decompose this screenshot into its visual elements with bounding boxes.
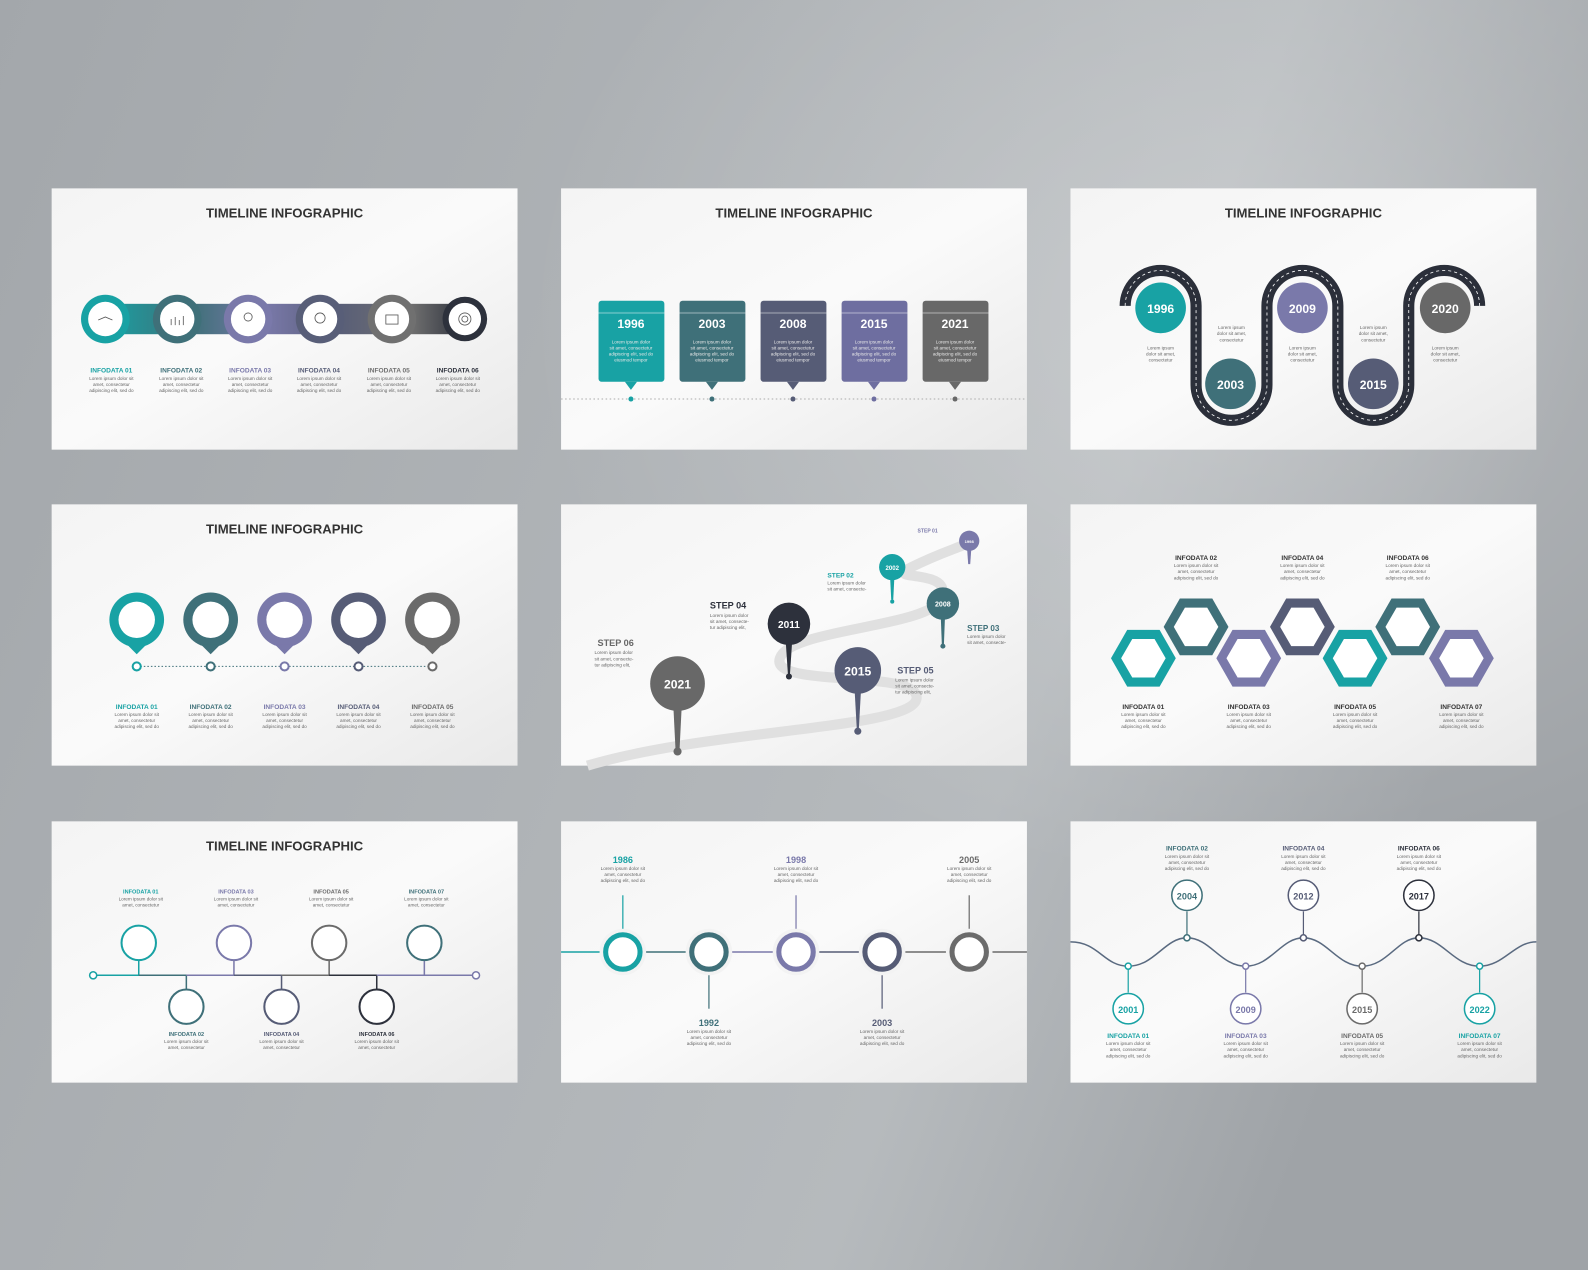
panel: slide 6 hexagons: INFODATA 03 <box>1228 704 1270 711</box>
step labels: STEP 01 <box>918 529 938 535</box>
year boxes: adipiscing elit, sed do <box>609 351 654 356</box>
panel: slide 4 pins: amet, consectetur <box>340 718 377 723</box>
labels: amet, consectetur <box>232 382 269 387</box>
panel: slide 9 wave timeline: INFODATA 06 <box>1398 846 1440 853</box>
panel: slide 9 wave timeline: Lorem ipsum dolor sit <box>1281 854 1326 859</box>
year circles: dolor sit amet, <box>1288 351 1317 356</box>
step pins: 2002 <box>885 566 900 572</box>
step labels: Lorem ipsum dolor <box>895 678 934 683</box>
panel: slide 9 wave timeline: adipiscing elit, sed do <box>1281 866 1326 871</box>
panel: slide 8 circle line: amet, consectetur <box>690 1035 728 1040</box>
labels <box>89 368 481 393</box>
title: TIMELINE INFOGRAPHIC <box>1225 206 1382 221</box>
labels: amet, consectetur <box>301 382 338 387</box>
panel: slide 4 pins: amet, consectetur <box>414 718 451 723</box>
panel: slide 4 pins: adipiscing elit, sed do <box>262 724 307 729</box>
panel: slide 8 circle line: 2005 <box>959 855 979 865</box>
year circles: 2003 <box>1217 378 1244 392</box>
panel: slide 4 pins: amet, consectetur <box>118 718 156 723</box>
year circles <box>1113 880 1495 1024</box>
panel: slide 9 wave timeline: amet, consectetur <box>1285 860 1322 865</box>
panel: slide 4 pins: adipiscing elit, sed do <box>336 724 381 729</box>
panel: slide 9 wave timeline: adipiscing elit, sed do <box>1165 866 1210 871</box>
panel: slide 8 circle line: amet, consectetur <box>864 1035 901 1040</box>
year boxes <box>599 301 988 402</box>
panel: slide 9 wave timeline: amet, consectetur <box>1344 1047 1381 1052</box>
labels: adipiscing elit, sed do <box>297 388 342 393</box>
labels: INFODATA 03 <box>229 368 271 375</box>
panel: slide 8 circle line: amet, consectetur <box>604 872 642 877</box>
year boxes: eiusmod tempor <box>938 358 972 363</box>
panel: slide 9 wave timeline: adipiscing elit, sed do <box>1106 1053 1151 1058</box>
year boxes: eiusmod tempor <box>695 358 729 363</box>
panel: slide 9 wave timeline: Lorem ipsum dolor sit <box>1106 1041 1151 1046</box>
step labels: Lorem ipsum dolor <box>967 634 1006 639</box>
panel: slide 8 circle line: Lorem ipsum dolor sit <box>687 1029 732 1034</box>
year boxes: Lorem ipsum dolor <box>774 339 813 344</box>
panel: slide 9 wave timeline: adipiscing elit, sed do <box>1457 1053 1502 1058</box>
panel: slide 9 wave timeline: INFODATA 07 <box>1459 1033 1501 1040</box>
panel: slide 6 hexagons: amet, consectetur <box>1284 569 1321 574</box>
step pins: 2008 <box>935 601 951 609</box>
year boxes: Lorem ipsum dolor <box>936 339 975 344</box>
panel: slide 6 hexagons <box>1070 504 1536 766</box>
panel: slide 8 circle line: 1986 <box>613 855 633 865</box>
panel: slide 6 hexagons: Lorem ipsum dolor sit <box>1333 712 1378 717</box>
panel: slide 8 circle line: Lorem ipsum dolor sit <box>774 866 819 871</box>
panel: slide 9 wave timeline: Lorem ipsum dolor sit <box>1457 1041 1503 1046</box>
panel: slide 9 wave timeline: INFODATA 04 <box>1282 846 1325 853</box>
panel: slide 9 wave timeline: INFODATA 02 <box>1166 846 1208 853</box>
year boxes: 2003 <box>698 317 726 331</box>
panel: slide 6 hexagons: adipiscing elit, sed do <box>1439 724 1484 729</box>
step labels: tur adipiscing elit, <box>594 662 630 667</box>
title: TIMELINE INFOGRAPHIC <box>206 206 364 221</box>
panel: slide 7 branch timeline: Lorem ipsum dolor sit <box>309 896 354 901</box>
panel: slide 6 hexagons: amet, consectetur <box>1230 718 1268 723</box>
year boxes: Lorem ipsum dolor <box>693 339 732 344</box>
step labels: sit amet, consecte- <box>710 619 749 624</box>
year boxes: adipiscing elit, sed do <box>933 351 978 356</box>
panel: slide 9 wave timeline: Lorem ipsum dolor sit <box>1340 1041 1385 1046</box>
wave <box>1070 938 1536 966</box>
panel: slide 9 wave timeline: amet, consectetur <box>1169 860 1206 865</box>
panel: slide 8 circle line: 1992 <box>699 1018 719 1028</box>
panel: slide 4 pins: Lorem ipsum dolor sit <box>115 712 160 717</box>
labels: amet, consectetur <box>370 382 408 387</box>
panel: slide 4 pins: INFODATA 04 <box>338 704 380 711</box>
circle timeline <box>561 895 1027 1009</box>
year circles: dolor sit amet, <box>1431 351 1460 356</box>
panel: slide 4 pins: adipiscing elit, sed do <box>115 724 159 729</box>
panel: slide 9 wave timeline: Lorem ipsum dolor sit <box>1224 1041 1269 1046</box>
panel: slide 8 circle line: Lorem ipsum dolor sit <box>947 866 992 871</box>
panel: slide 7 branch timeline: INFODATA 02 <box>169 1032 204 1038</box>
panel: slide 9 wave timeline: amet, consectetur <box>1110 1047 1147 1052</box>
step labels: sit amet, consecte- <box>895 684 935 689</box>
year circles: dolor sit amet, <box>1146 351 1175 356</box>
panel: slide 9 wave timeline: Lorem ipsum dolor sit <box>1397 854 1442 859</box>
panel: slide 7 branch timeline: INFODATA 04 <box>264 1032 300 1038</box>
chain timeline <box>81 295 487 343</box>
panel: slide 6 hexagons: amet, consectetur <box>1125 718 1162 723</box>
panel: slide 6 hexagons: adipiscing elit, sed do <box>1227 724 1271 729</box>
panel: slide 6 hexagons: adipiscing elit, sed do <box>1121 724 1166 729</box>
panel: slide 7 branch timeline: INFODATA 03 <box>218 889 254 895</box>
panel: slide 7 branch timeline: Lorem ipsum dolor sit <box>355 1039 400 1044</box>
panel: slide 3 road <box>1070 188 1536 450</box>
step pins: 2015 <box>844 665 872 679</box>
panel: slide 9 wave timeline: INFODATA 01 <box>1107 1033 1149 1040</box>
panel: slide 4 pins: INFODATA 03 <box>264 704 306 711</box>
year boxes: eiusmod tempor <box>614 358 648 363</box>
step pins <box>650 531 979 756</box>
labels: INFODATA 06 <box>437 368 479 375</box>
year circles: 2009 <box>1236 1005 1256 1015</box>
panel: slide 9 wave timeline: Lorem ipsum dolor sit <box>1165 854 1210 859</box>
title: TIMELINE INFOGRAPHIC <box>206 839 364 854</box>
year circles: 2015 <box>1352 1005 1372 1015</box>
year boxes: 2015 <box>860 317 888 331</box>
panel: slide 9 wave timeline: amet, consectetur <box>1461 1047 1499 1052</box>
panel: slide 4 pins: Lorem ipsum dolor sit <box>262 712 307 717</box>
panel: slide 2 year boxes <box>561 188 1027 450</box>
year boxes: sit amet, consectetur <box>772 345 815 350</box>
step labels: sit amet, consecte- <box>827 586 867 591</box>
panel: slide 7 branch timeline: amet, consectetur <box>358 1045 396 1050</box>
year boxes: adipiscing elit, sed do <box>852 351 897 356</box>
panel: slide 7 branch timeline: amet, consectetur <box>263 1045 300 1050</box>
panel: slide 4 pins: INFODATA 02 <box>190 704 232 711</box>
labels: INFODATA 05 <box>368 368 410 375</box>
panel: slide 6 hexagons: amet, consectetur <box>1337 718 1374 723</box>
hexagon chain <box>1111 599 1494 687</box>
panel: slide 6 hexagons: adipiscing elit, sed do <box>1174 575 1219 580</box>
step labels: tur adipiscing elit, <box>710 625 746 630</box>
panel: slide 6 hexagons: Lorem ipsum dolor sit <box>1386 563 1431 568</box>
step labels: Lorem ipsum dolor <box>594 650 633 655</box>
panel: slide 6 hexagons: Lorem ipsum dolor sit <box>1121 712 1166 717</box>
panel: slide 6 hexagons: amet, consectetur <box>1178 569 1215 574</box>
step labels: STEP 02 <box>827 572 854 579</box>
labels: adipiscing elit, sed do <box>367 388 412 393</box>
year boxes: 2008 <box>779 317 807 331</box>
panel: slide 4 pins: Lorem ipsum dolor sit <box>188 712 234 717</box>
panel: slide 8 circle line: adipiscing elit, sed do <box>601 878 645 883</box>
step labels: STEP 06 <box>598 638 634 648</box>
labels: INFODATA 02 <box>160 368 203 375</box>
panel: slide 6 hexagons: adipiscing elit, sed do <box>1333 724 1378 729</box>
panel: slide 8 circle line: adipiscing elit, sed do <box>774 878 819 883</box>
panel: slide 4 pins: INFODATA 05 <box>411 704 454 711</box>
panel: slide 7 branch timeline: Lorem ipsum dolor sit <box>164 1039 209 1044</box>
step pins: 2011 <box>778 620 800 631</box>
labels: INFODATA 04 <box>298 368 340 375</box>
panel: slide 7 branch timeline: amet, consectetur <box>313 902 350 907</box>
year boxes: sit amet, consectetur <box>853 345 896 350</box>
panel: slide 4 pins <box>52 504 518 766</box>
labels: Lorem ipsum dolor sit <box>436 376 481 381</box>
labels: adipiscing elit, sed do <box>89 388 134 393</box>
panel: slide 6 hexagons: amet, consectetur <box>1443 718 1480 723</box>
panel: slide 6 hexagons: amet, consectetur <box>1389 569 1427 574</box>
labels: adipiscing elit, sed do <box>159 388 204 393</box>
panel: slide 9 wave timeline: INFODATA 03 <box>1225 1033 1267 1040</box>
labels: adipiscing elit, sed do <box>436 388 480 393</box>
labels: amet, consectetur <box>163 382 200 387</box>
year circles: 2009 <box>1289 302 1316 316</box>
panel: slide 6 hexagons: adipiscing elit, sed do <box>1280 575 1325 580</box>
year circles: consectetur <box>1361 337 1386 342</box>
panel: slide 7 branch timeline: Lorem ipsum dolor sit <box>214 896 259 901</box>
panel: slide 8 circle line: amet, consectetur <box>951 872 988 877</box>
panel: slide 9 wave timeline <box>1070 821 1536 1083</box>
pins <box>109 592 460 670</box>
year boxes: Lorem ipsum dolor <box>855 339 894 344</box>
panel: slide 8 circle line: 1998 <box>786 855 806 865</box>
panel: slide 8 circle line: amet, consectetur <box>778 872 815 877</box>
labels: Lorem ipsum dolor sit <box>89 376 134 381</box>
year circles <box>1135 283 1471 409</box>
step labels: tur adipiscing elit, <box>895 690 931 695</box>
year circles: 2015 <box>1360 378 1387 392</box>
year boxes: eiusmod tempor <box>776 358 810 363</box>
panel: slide 9 wave timeline: adipiscing elit, sed do <box>1224 1053 1268 1058</box>
year circles: 2004 <box>1177 891 1198 901</box>
panel: slide 7 branch timeline: amet, consectetur <box>122 902 160 907</box>
step labels: STEP 04 <box>710 601 747 611</box>
labels: INFODATA 01 <box>90 368 133 375</box>
panel: slide 8 circle line: Lorem ipsum dolor sit <box>601 866 646 871</box>
panel: slide 6 hexagons: INFODATA 04 <box>1281 555 1324 562</box>
year boxes: Lorem ipsum dolor <box>612 339 651 344</box>
panel: slide 4 pins: Lorem ipsum dolor sit <box>336 712 381 717</box>
panel: slide 1 chain <box>52 188 518 450</box>
year boxes: adipiscing elit, sed do <box>690 351 735 356</box>
year circles: consectetur <box>1290 358 1315 363</box>
step pins: 2021 <box>664 678 691 692</box>
title: TIMELINE INFOGRAPHIC <box>715 206 873 221</box>
year circles: 2017 <box>1409 891 1429 901</box>
panel: slide 6 hexagons: Lorem ipsum dolor sit <box>1439 712 1484 717</box>
panel: slide 6 hexagons: INFODATA 05 <box>1334 704 1376 711</box>
panel: slide 7 branch timeline: INFODATA 07 <box>409 889 444 895</box>
panel: slide 7 branch timeline: amet, consectetur <box>168 1045 205 1050</box>
panel: slide 7 branch timeline: INFODATA 06 <box>359 1032 394 1038</box>
labels: adipiscing elit, sed do <box>228 388 273 393</box>
panel: slide 8 circle line: adipiscing elit, sed do <box>860 1041 905 1046</box>
panel: slide 7 branch timeline: INFODATA 05 <box>313 889 349 895</box>
year circles: 2020 <box>1432 302 1459 316</box>
panel: slide 9 wave timeline: adipiscing elit, sed do <box>1397 866 1441 871</box>
panel: slide 6 hexagons: Lorem ipsum dolor sit <box>1280 563 1325 568</box>
panel: slide 6 hexagons: INFODATA 02 <box>1175 555 1217 562</box>
panel: slide 8 circle line: adipiscing elit, sed do <box>687 1041 732 1046</box>
panel: slide 6 hexagons: INFODATA 07 <box>1440 704 1483 711</box>
panel: slide 8 circle line: Lorem ipsum dolor sit <box>860 1029 905 1034</box>
branch line <box>90 926 480 1024</box>
year boxes: eiusmod tempor <box>857 358 891 363</box>
year circles: Lorem ipsum <box>1360 325 1387 330</box>
panel: slide 7 branch timeline: Lorem ipsum dolor sit <box>119 896 164 901</box>
step labels <box>594 529 1007 695</box>
panel: slide 7 branch timeline: Lorem ipsum dolor sit <box>404 896 449 901</box>
year circles: dolor sit amet, <box>1217 331 1246 336</box>
year circles: 1996 <box>1147 302 1174 316</box>
panel: slide 4 pins: adipiscing elit, sed do <box>410 724 455 729</box>
step labels: sit amet, consecte- <box>594 656 634 661</box>
step labels: STEP 03 <box>967 624 1000 633</box>
year circles: Lorem ipsum <box>1147 345 1174 350</box>
labels: Lorem ipsum dolor sit <box>367 376 412 381</box>
panel: slide 8 circle line: adipiscing elit, sed do <box>947 878 992 883</box>
year circles: Lorem ipsum <box>1218 325 1245 330</box>
panel: slide 4 pins: INFODATA 01 <box>116 704 158 711</box>
panel: slide 7 branch timeline <box>52 821 518 1083</box>
year boxes: adipiscing elit, sed do <box>771 351 816 356</box>
panel: slide 7 branch timeline: amet, consectetur <box>218 902 255 907</box>
panel: slide 6 hexagons: INFODATA 06 <box>1387 555 1429 562</box>
year circles: dolor sit amet, <box>1359 331 1388 336</box>
panel: slide 4 pins: amet, consectetur <box>192 718 230 723</box>
labels: amet, consectetur <box>439 382 477 387</box>
panel: slide 4 pins: adipiscing elit, sed do <box>188 724 233 729</box>
road <box>1125 270 1480 420</box>
panel: slide 5 winding road steps <box>561 504 1027 766</box>
panel: slide 9 wave timeline: adipiscing elit, sed do <box>1340 1053 1385 1058</box>
panel: slide 6 hexagons: Lorem ipsum dolor sit <box>1227 712 1272 717</box>
panel: slide 6 hexagons: INFODATA 01 <box>1122 704 1165 711</box>
year circles: 2022 <box>1470 1005 1490 1015</box>
panel: slide 9 wave timeline: amet, consectetur <box>1227 1047 1265 1052</box>
panel: slide 7 branch timeline: INFODATA 01 <box>123 889 158 895</box>
year boxes: sit amet, consectetur <box>934 345 977 350</box>
panel: slide 8 circle line <box>561 821 1027 1083</box>
year boxes: 1996 <box>617 317 645 331</box>
step labels: Lorem ipsum dolor <box>827 580 866 585</box>
step pins: 1998 <box>965 539 974 544</box>
panel: slide 8 circle line: 2003 <box>872 1018 892 1028</box>
year boxes: sit amet, consectetur <box>610 345 653 350</box>
year circles: consectetur <box>1220 337 1244 342</box>
year boxes: 2021 <box>942 317 969 331</box>
step labels: sit amet, consecte- <box>967 640 1007 645</box>
panel: slide 4 pins: Lorem ipsum dolor sit <box>410 712 455 717</box>
labels: Lorem ipsum dolor sit <box>159 376 204 381</box>
year circles: 2001 <box>1118 1005 1138 1015</box>
step labels: Lorem ipsum dolor <box>710 613 749 618</box>
year boxes: sit amet, consectetur <box>691 345 734 350</box>
panel: slide 7 branch timeline: amet, consectetur <box>408 902 445 907</box>
year circles: Lorem ipsum <box>1289 345 1316 350</box>
panel: slide 4 pins: amet, consectetur <box>266 718 303 723</box>
panel: slide 6 hexagons: adipiscing elit, sed do <box>1386 575 1430 580</box>
step labels: STEP 05 <box>897 665 934 675</box>
labels: Lorem ipsum dolor sit <box>297 376 342 381</box>
year circles: 2012 <box>1293 891 1314 901</box>
panel: slide 6 hexagons: Lorem ipsum dolor sit <box>1174 563 1219 568</box>
year circles: consectetur <box>1149 358 1173 363</box>
year circles: Lorem ipsum <box>1432 345 1459 350</box>
year circles: consectetur <box>1433 358 1458 363</box>
panel: slide 9 wave timeline: INFODATA 05 <box>1341 1033 1383 1040</box>
labels: Lorem ipsum dolor sit <box>228 376 273 381</box>
panel: slide 7 branch timeline: Lorem ipsum dolor sit <box>259 1039 304 1044</box>
title: TIMELINE INFOGRAPHIC <box>206 522 364 537</box>
labels: amet, consectetur <box>93 382 130 387</box>
panel: slide 9 wave timeline: amet, consectetur <box>1400 860 1438 865</box>
